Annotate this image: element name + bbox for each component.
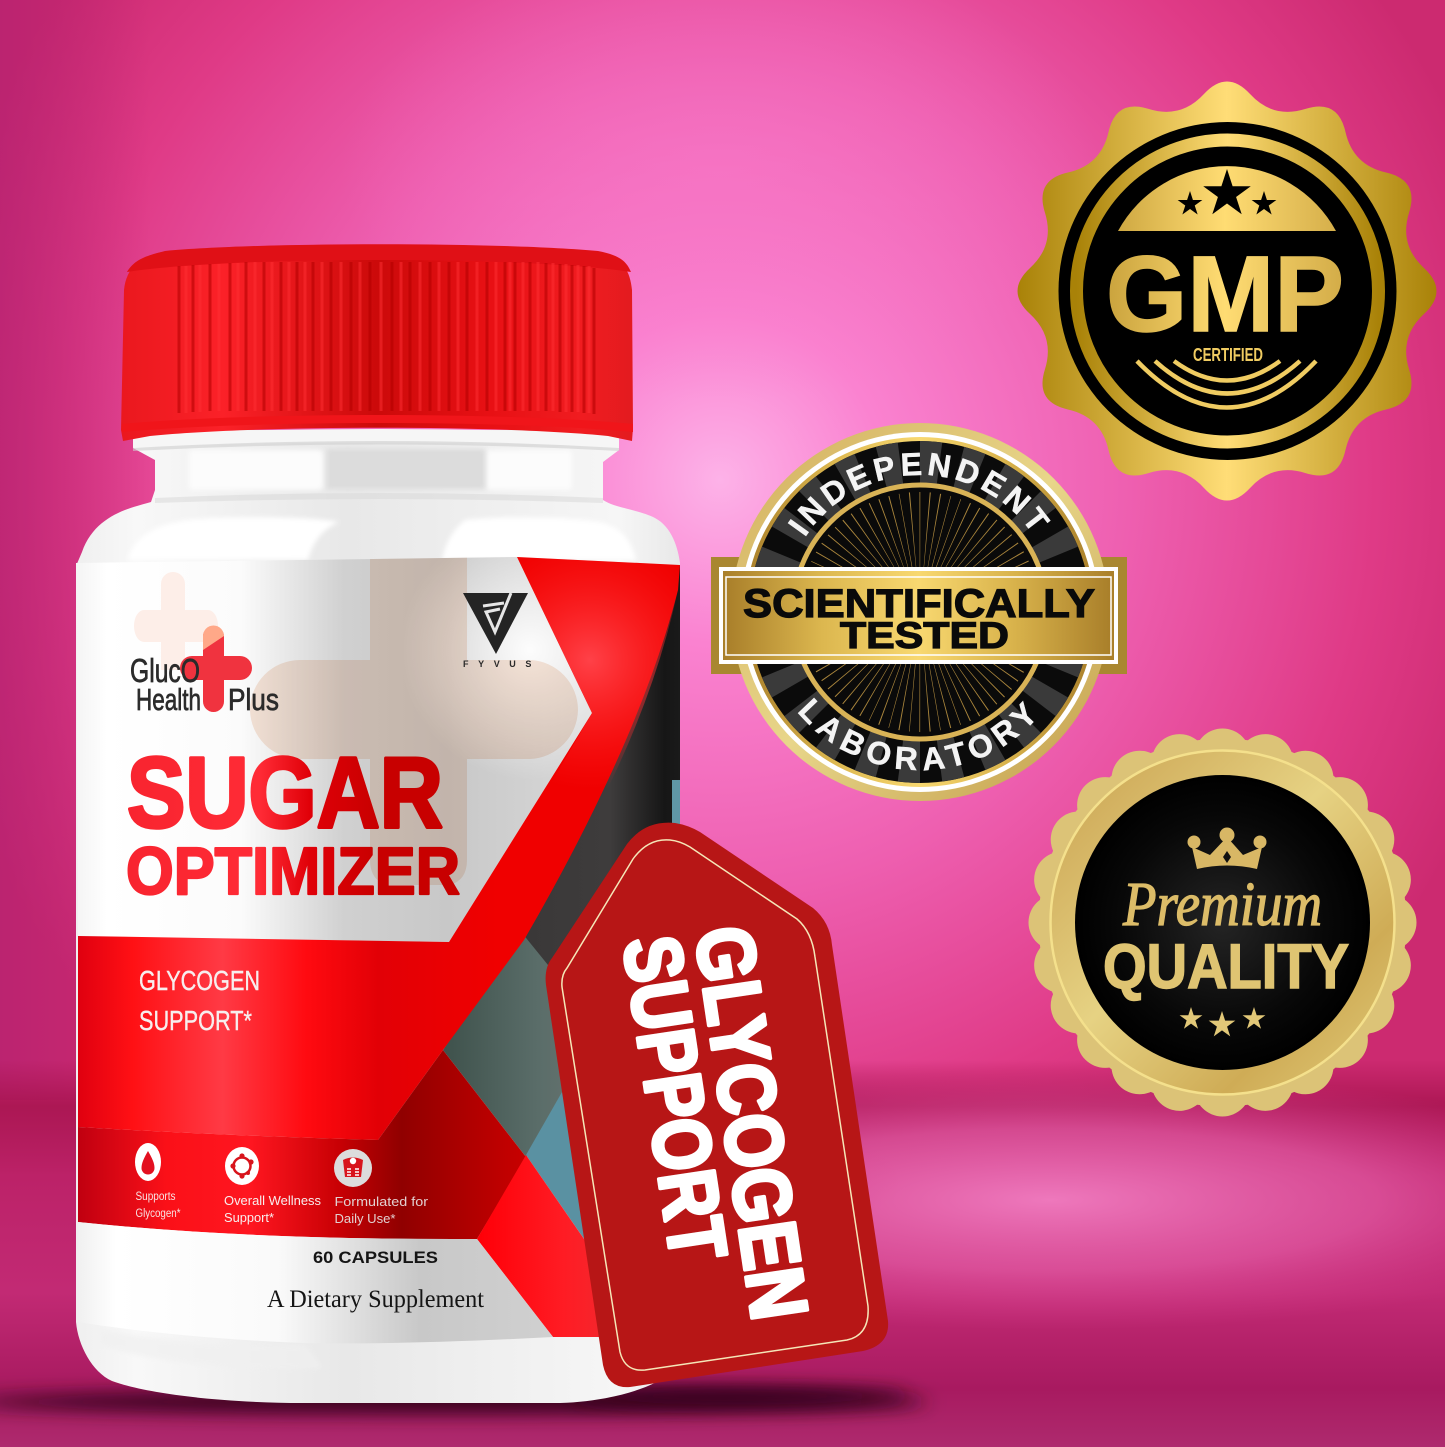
background floor [0, 1060, 1445, 1447]
brand logo: Gluco Health Plus: Plus [228, 682, 279, 717]
supplement statement: A Dietary Supplement [267, 1286, 484, 1313]
badge inner sunburst [793, 485, 1047, 739]
bottle base reflections [100, 1330, 323, 1369]
shoulder white highlights [128, 517, 339, 560]
icon: daily scale [334, 1149, 372, 1187]
premium script: Premium [1122, 871, 1322, 939]
label: teal sliver [672, 780, 680, 826]
icon: overall wellness [225, 1147, 259, 1185]
badge: independent laboratory scientifically tested [711, 423, 1127, 801]
crown icon [1188, 828, 1266, 869]
logo plus icon [180, 626, 252, 712]
label: dark panel [522, 565, 680, 968]
tag text: GLYCOGEN [677, 920, 824, 1325]
claim text [139, 965, 260, 1036]
label: white panel [76, 555, 592, 942]
brand logo: Gluco Health Plus: Health [136, 682, 201, 717]
large faded cross [250, 555, 578, 885]
benefit: overall wellness: Support* [224, 1211, 274, 1225]
bottle cap [121, 244, 633, 441]
bottle ground shadow [0, 1387, 930, 1414]
label: grey panel [443, 933, 600, 1157]
badge: premium quality [1038, 738, 1406, 1106]
benefit: supports glycogen: Glycogen* [136, 1208, 181, 1220]
label: main red band with chevron [78, 557, 680, 1140]
icon: glycogen drop [135, 1143, 161, 1181]
claim text: SUPPORT* [139, 1005, 252, 1036]
product bottle [76, 244, 680, 1403]
brand logo: Fyvus: FYVUS [463, 659, 541, 669]
benefit: daily use [334, 1195, 428, 1226]
GMP wordmark: GMP [1106, 233, 1344, 354]
certified text: CERTIFIED [1193, 345, 1263, 365]
brand logo: Fyvus [463, 593, 541, 669]
benefit: daily use: Daily Use* [334, 1212, 396, 1226]
small faded cross [134, 572, 218, 670]
product title [126, 737, 460, 909]
ribbon back tails [711, 557, 1127, 674]
badge arc text top: INDEPENDENT [788, 452, 1051, 536]
brand logo: Gluco Health Plus [130, 626, 279, 717]
glycogen support tag [546, 823, 888, 1387]
quality word: QUALITY [1103, 932, 1349, 1002]
badge ribbon: TESTED [840, 615, 1009, 656]
brand logo: Gluco Health Plus: GlucO [130, 652, 200, 689]
label: teal panel [526, 1092, 600, 1262]
benefit: supports glycogen: Supports [136, 1191, 176, 1203]
benefit: daily use: Formulated for [334, 1195, 428, 1209]
tag text [605, 920, 824, 1325]
label: lower red strip [78, 1050, 526, 1239]
badge ribbon: SCIENTIFICALLY [743, 582, 1095, 626]
badge arc text bottom: LABORATORY [798, 698, 1034, 771]
GMP arcs [1137, 361, 1316, 408]
GMP dome with stars [1118, 166, 1336, 231]
bottle body [76, 430, 680, 1403]
label: lower right red panel [477, 1155, 640, 1337]
badge ribbon [719, 567, 1118, 664]
product title: SUGAR [127, 737, 443, 849]
claim text: GLYCOGEN [139, 965, 260, 996]
product title: OPTIMIZER [126, 834, 460, 909]
benefit: overall wellness [224, 1194, 321, 1225]
capsule count: 60 CAPSULES [313, 1248, 438, 1267]
three stars [1180, 1007, 1265, 1036]
benefit: supports glycogen [136, 1191, 181, 1220]
bottle neck highlights [128, 429, 636, 560]
label: lower white panel [77, 1222, 553, 1343]
badge: GMP certified [1018, 82, 1436, 500]
tag text: SUPPORT [605, 930, 743, 1266]
benefit: overall wellness: Overall Wellness [224, 1194, 321, 1208]
